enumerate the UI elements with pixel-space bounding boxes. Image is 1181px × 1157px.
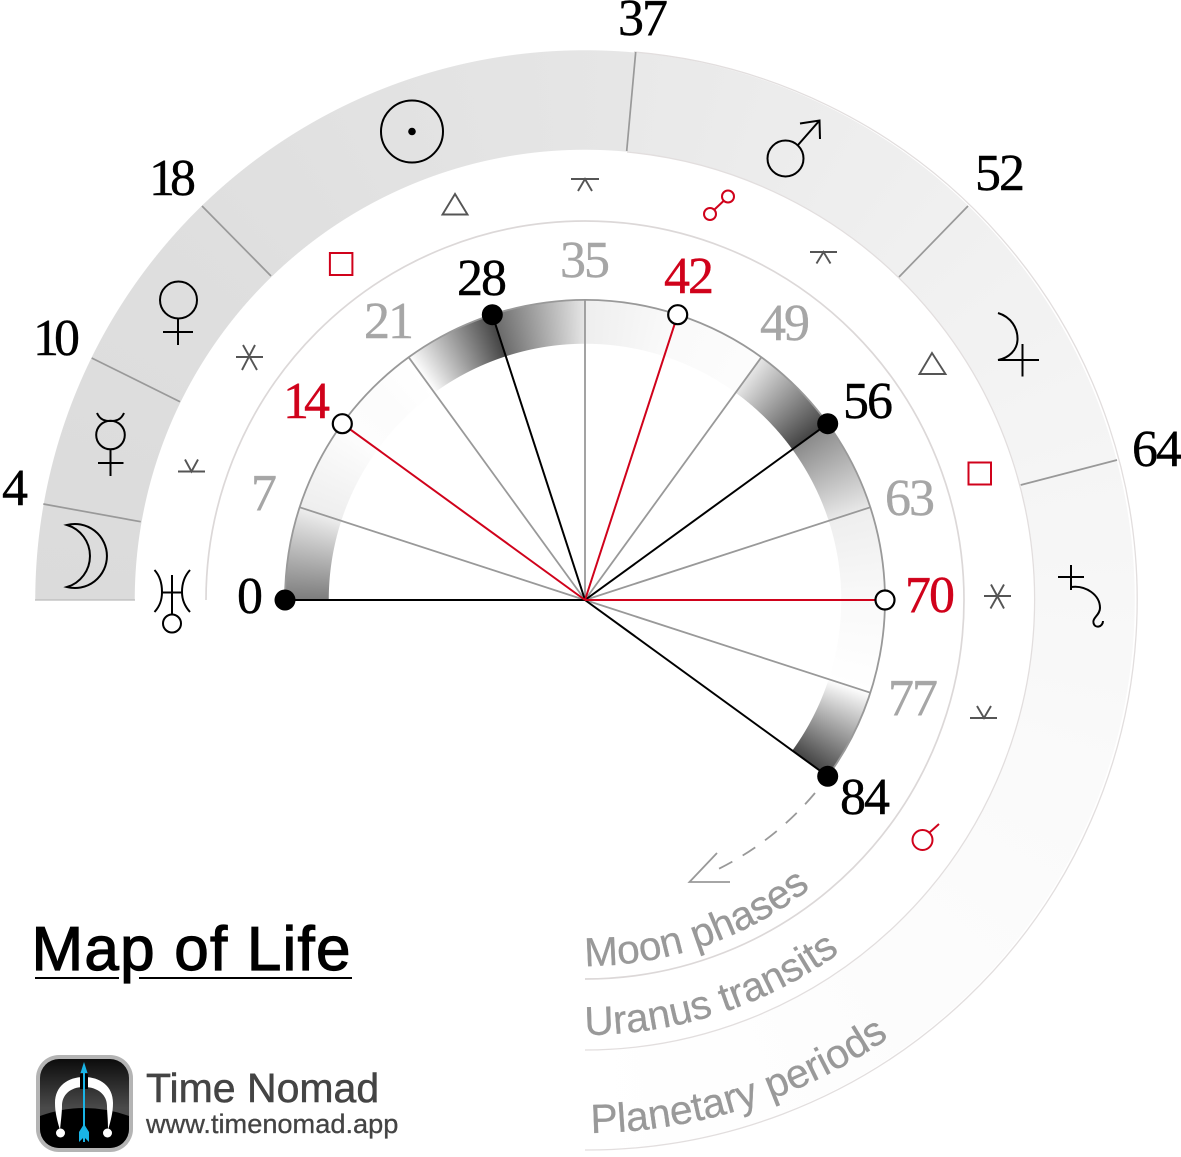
moon phase age labels: 35 bbox=[560, 232, 608, 289]
moon phase age labels: 28 bbox=[457, 250, 506, 307]
open phase markers bbox=[333, 305, 894, 610]
icon: Time Nomad app bbox=[36, 1055, 133, 1152]
aspect: square right bbox=[968, 462, 991, 484]
moon phase age labels: 21 bbox=[364, 293, 412, 350]
moon phase age labels: 84 bbox=[840, 769, 890, 826]
moon phase age labels: 77 bbox=[888, 670, 937, 727]
aspect: conjunction bbox=[912, 824, 939, 850]
brand name: Time Nomad bbox=[146, 1065, 379, 1111]
icon: venus bbox=[160, 282, 197, 345]
moon phase age labels bbox=[237, 232, 954, 826]
planetary period age labels: 4 bbox=[2, 460, 28, 517]
planetary period age labels bbox=[2, 0, 1181, 517]
moon phase age labels: 56 bbox=[843, 373, 892, 430]
moon phase outer arc bbox=[285, 300, 885, 776]
moon phase age labels: 49 bbox=[760, 295, 808, 352]
title: Map of Life bbox=[32, 915, 350, 984]
icon: moon bbox=[67, 524, 107, 588]
aspect: semi-sextile right bbox=[970, 706, 997, 718]
icon: sun bbox=[381, 100, 443, 162]
label: Moon phases: Moon phases bbox=[586, 874, 808, 966]
aspect: trine right bbox=[920, 353, 946, 374]
panel: moon phases gradient band bbox=[286, 300, 884, 770]
aspect: sextile left bbox=[236, 345, 263, 370]
moon phase age labels: 70 bbox=[905, 567, 954, 624]
moon phase age labels: 63 bbox=[885, 470, 933, 527]
icon: mercury bbox=[96, 413, 125, 476]
icon: uranus bbox=[154, 570, 190, 632]
aspect: square left bbox=[330, 253, 352, 275]
moon phase gray spokes bbox=[300, 300, 870, 693]
moon phase red spokes bbox=[342, 315, 885, 600]
planetary period age labels: 10 bbox=[33, 310, 79, 367]
arrow: continuation dashed bbox=[690, 793, 815, 882]
aspect: inverted semi-sextile right bbox=[810, 252, 837, 264]
moon phase black spokes bbox=[285, 315, 828, 776]
moon phase age labels: 7 bbox=[251, 465, 276, 522]
aspect: inverted semi-sextile top bbox=[571, 179, 599, 191]
label: Planetary periods: Planetary periods bbox=[593, 1023, 886, 1134]
aspect: trine left bbox=[442, 194, 468, 214]
planetary period age labels: 18 bbox=[149, 150, 195, 207]
planetary period dividers bbox=[43, 52, 1117, 522]
moon phase age labels: 0 bbox=[237, 568, 262, 625]
aspect: semi-sextile left bbox=[178, 460, 205, 472]
panel: planetary periods ring bbox=[35, 50, 1134, 600]
planetary period age labels: 64 bbox=[1132, 421, 1181, 478]
icon: jupiter bbox=[998, 313, 1039, 376]
moon phase age labels: 42 bbox=[664, 248, 712, 305]
filled phase markers bbox=[274, 304, 838, 787]
brand url: www.timenomad.app bbox=[145, 1108, 398, 1139]
aspect: opposition bbox=[704, 190, 734, 220]
icon: mars bbox=[768, 120, 820, 176]
label: Uranus transits: Uranus transits bbox=[586, 938, 837, 1036]
icon: saturn bbox=[1058, 565, 1103, 627]
planetary period age labels: 52 bbox=[975, 145, 1023, 202]
moon phase age labels: 14 bbox=[283, 373, 330, 430]
aspect: sextile right bbox=[984, 584, 1011, 608]
